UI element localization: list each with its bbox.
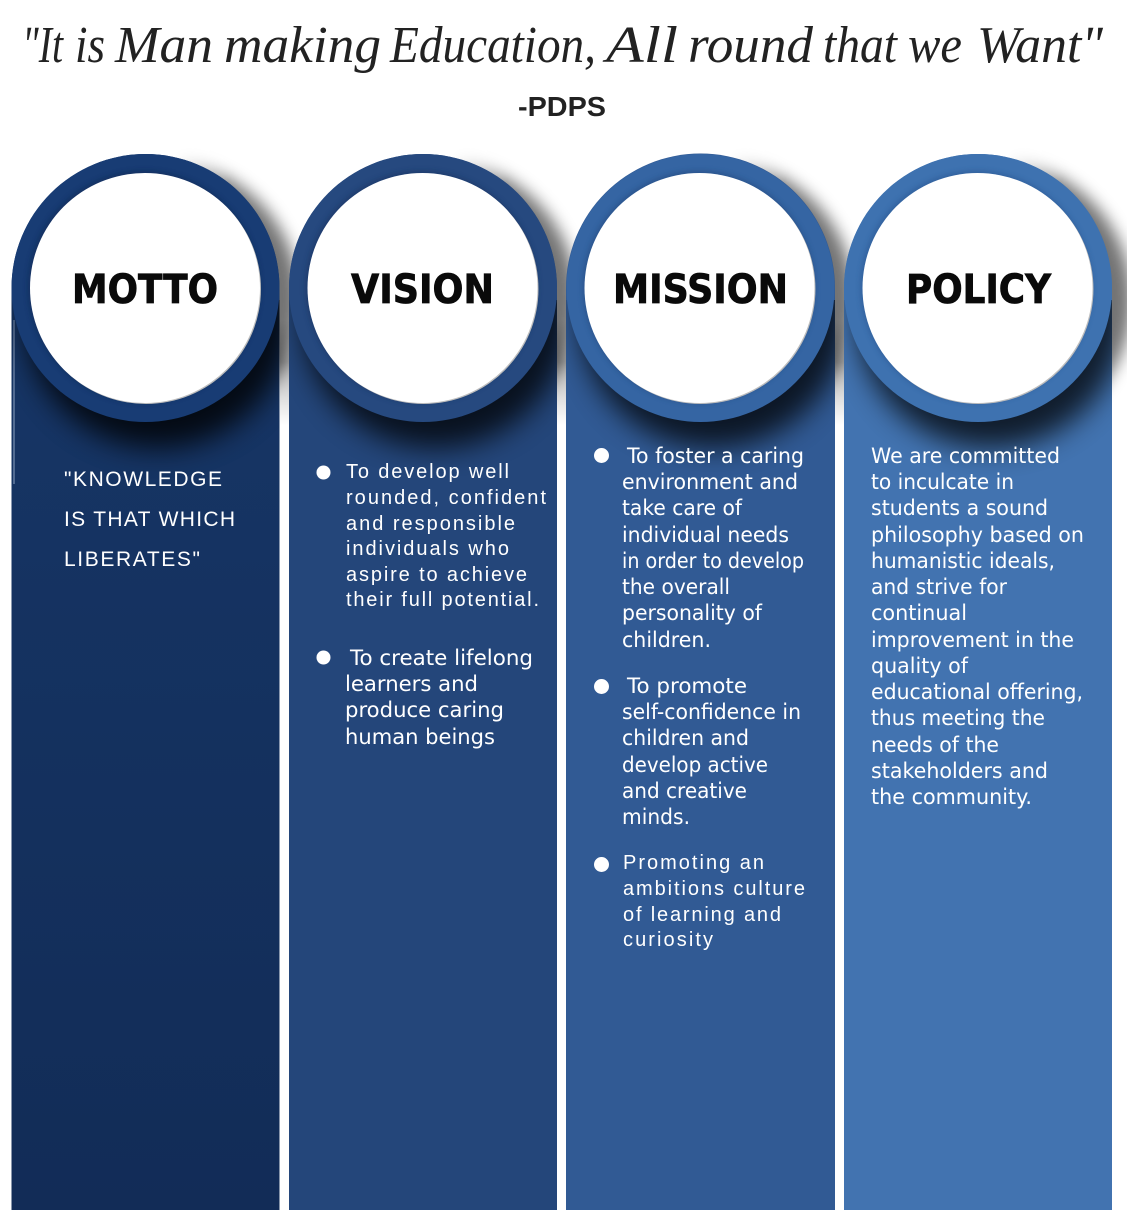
mission bullet three: ambitions culture — [623, 878, 805, 900]
mission bullet three — [594, 852, 805, 951]
policy text: quality of — [871, 654, 969, 678]
title quote: Education, — [389, 17, 596, 74]
vision bullet one: To develop well — [346, 461, 509, 483]
policy text: the community. — [871, 785, 1032, 809]
policy text: We are committed — [871, 444, 1060, 468]
vision bullet one: rounded, confident — [346, 487, 546, 509]
vision bullet one: and responsible — [346, 513, 515, 535]
title quote — [22, 17, 1104, 74]
badge: policy — [862, 173, 1092, 403]
title quote: Want" — [977, 17, 1104, 74]
vision bullet one: aspire to achieve — [346, 564, 527, 586]
panel: motto — [12, 154, 300, 1210]
mission bullet two: minds. — [622, 805, 690, 829]
policy text: continual — [871, 601, 967, 625]
badge: vision — [308, 173, 538, 403]
title quote: All — [602, 17, 678, 74]
title quote: that — [823, 17, 898, 74]
policy text: and strive for — [871, 575, 1007, 599]
mission bullet two: children and — [622, 726, 749, 750]
badge: mission — [584, 173, 814, 403]
vision bullet one: individuals who — [346, 538, 509, 560]
heading: mission: MISSION — [613, 267, 788, 313]
badge: motto — [30, 173, 260, 403]
vision bullet one: their full potential. — [346, 589, 539, 611]
mission bullet two: develop active — [622, 753, 768, 777]
title quote: round — [688, 17, 814, 74]
panel: policy — [844, 154, 1127, 1210]
mission bullet three: of learning and — [623, 904, 781, 926]
title quote: Man — [114, 17, 213, 74]
policy text: philosophy based on — [871, 523, 1084, 547]
vision bullet two: human beings — [345, 725, 495, 749]
mission bullet one: the overall — [622, 575, 730, 599]
motto text: IS THAT WHICH — [64, 508, 235, 531]
policy text: thus meeting the — [871, 706, 1045, 730]
vision bullet two: produce caring — [345, 698, 504, 722]
motto text — [64, 468, 235, 571]
title quote: "It — [22, 17, 64, 74]
title quote: we — [908, 17, 962, 74]
mission bullet one — [594, 444, 804, 652]
mission bullet one: personality of — [622, 601, 763, 625]
vision bullet one — [316, 461, 546, 611]
title quote: is — [75, 17, 105, 74]
mission bullet two: and creative — [622, 779, 747, 803]
motto text: LIBERATES" — [64, 548, 200, 571]
mission bullet one: To foster a caring — [626, 444, 804, 468]
mission bullet three: curiosity — [623, 929, 713, 951]
policy text: needs of the — [871, 733, 999, 757]
panel: mission — [566, 154, 854, 1210]
policy text: educational offering, — [871, 680, 1083, 704]
vision bullet two: To create lifelong — [349, 646, 533, 670]
heading: motto: MOTTO — [72, 267, 218, 313]
panel: vision — [289, 154, 577, 1210]
vision bullet two: learners and — [345, 672, 478, 696]
vision bullet two — [316, 646, 533, 749]
mission bullet two: To promote — [626, 674, 747, 698]
policy text: to inculcate in — [871, 470, 1014, 494]
mission bullet one: take care of — [622, 496, 743, 520]
heading: vision: VISION — [351, 267, 494, 313]
mission bullet three: Promoting an — [623, 852, 764, 874]
mission bullet one: children. — [622, 628, 711, 652]
attribution: -PDPS — [518, 91, 606, 122]
heading: policy: POLICY — [906, 267, 1052, 313]
policy text: stakeholders and — [871, 759, 1048, 783]
policy text: students a sound — [871, 496, 1048, 520]
policy text — [871, 444, 1084, 809]
mission bullet two: self-confidence in — [622, 700, 801, 724]
mission bullet one: in order to develop — [622, 549, 804, 573]
title quote: making — [224, 17, 381, 74]
policy text: improvement in the — [871, 628, 1074, 652]
mission bullet one: environment and — [622, 470, 798, 494]
mission bullet one: individual needs — [622, 523, 789, 547]
mission bullet two — [594, 674, 801, 829]
motto text: "KNOWLEDGE — [64, 468, 222, 491]
policy text: humanistic ideals, — [871, 549, 1055, 573]
